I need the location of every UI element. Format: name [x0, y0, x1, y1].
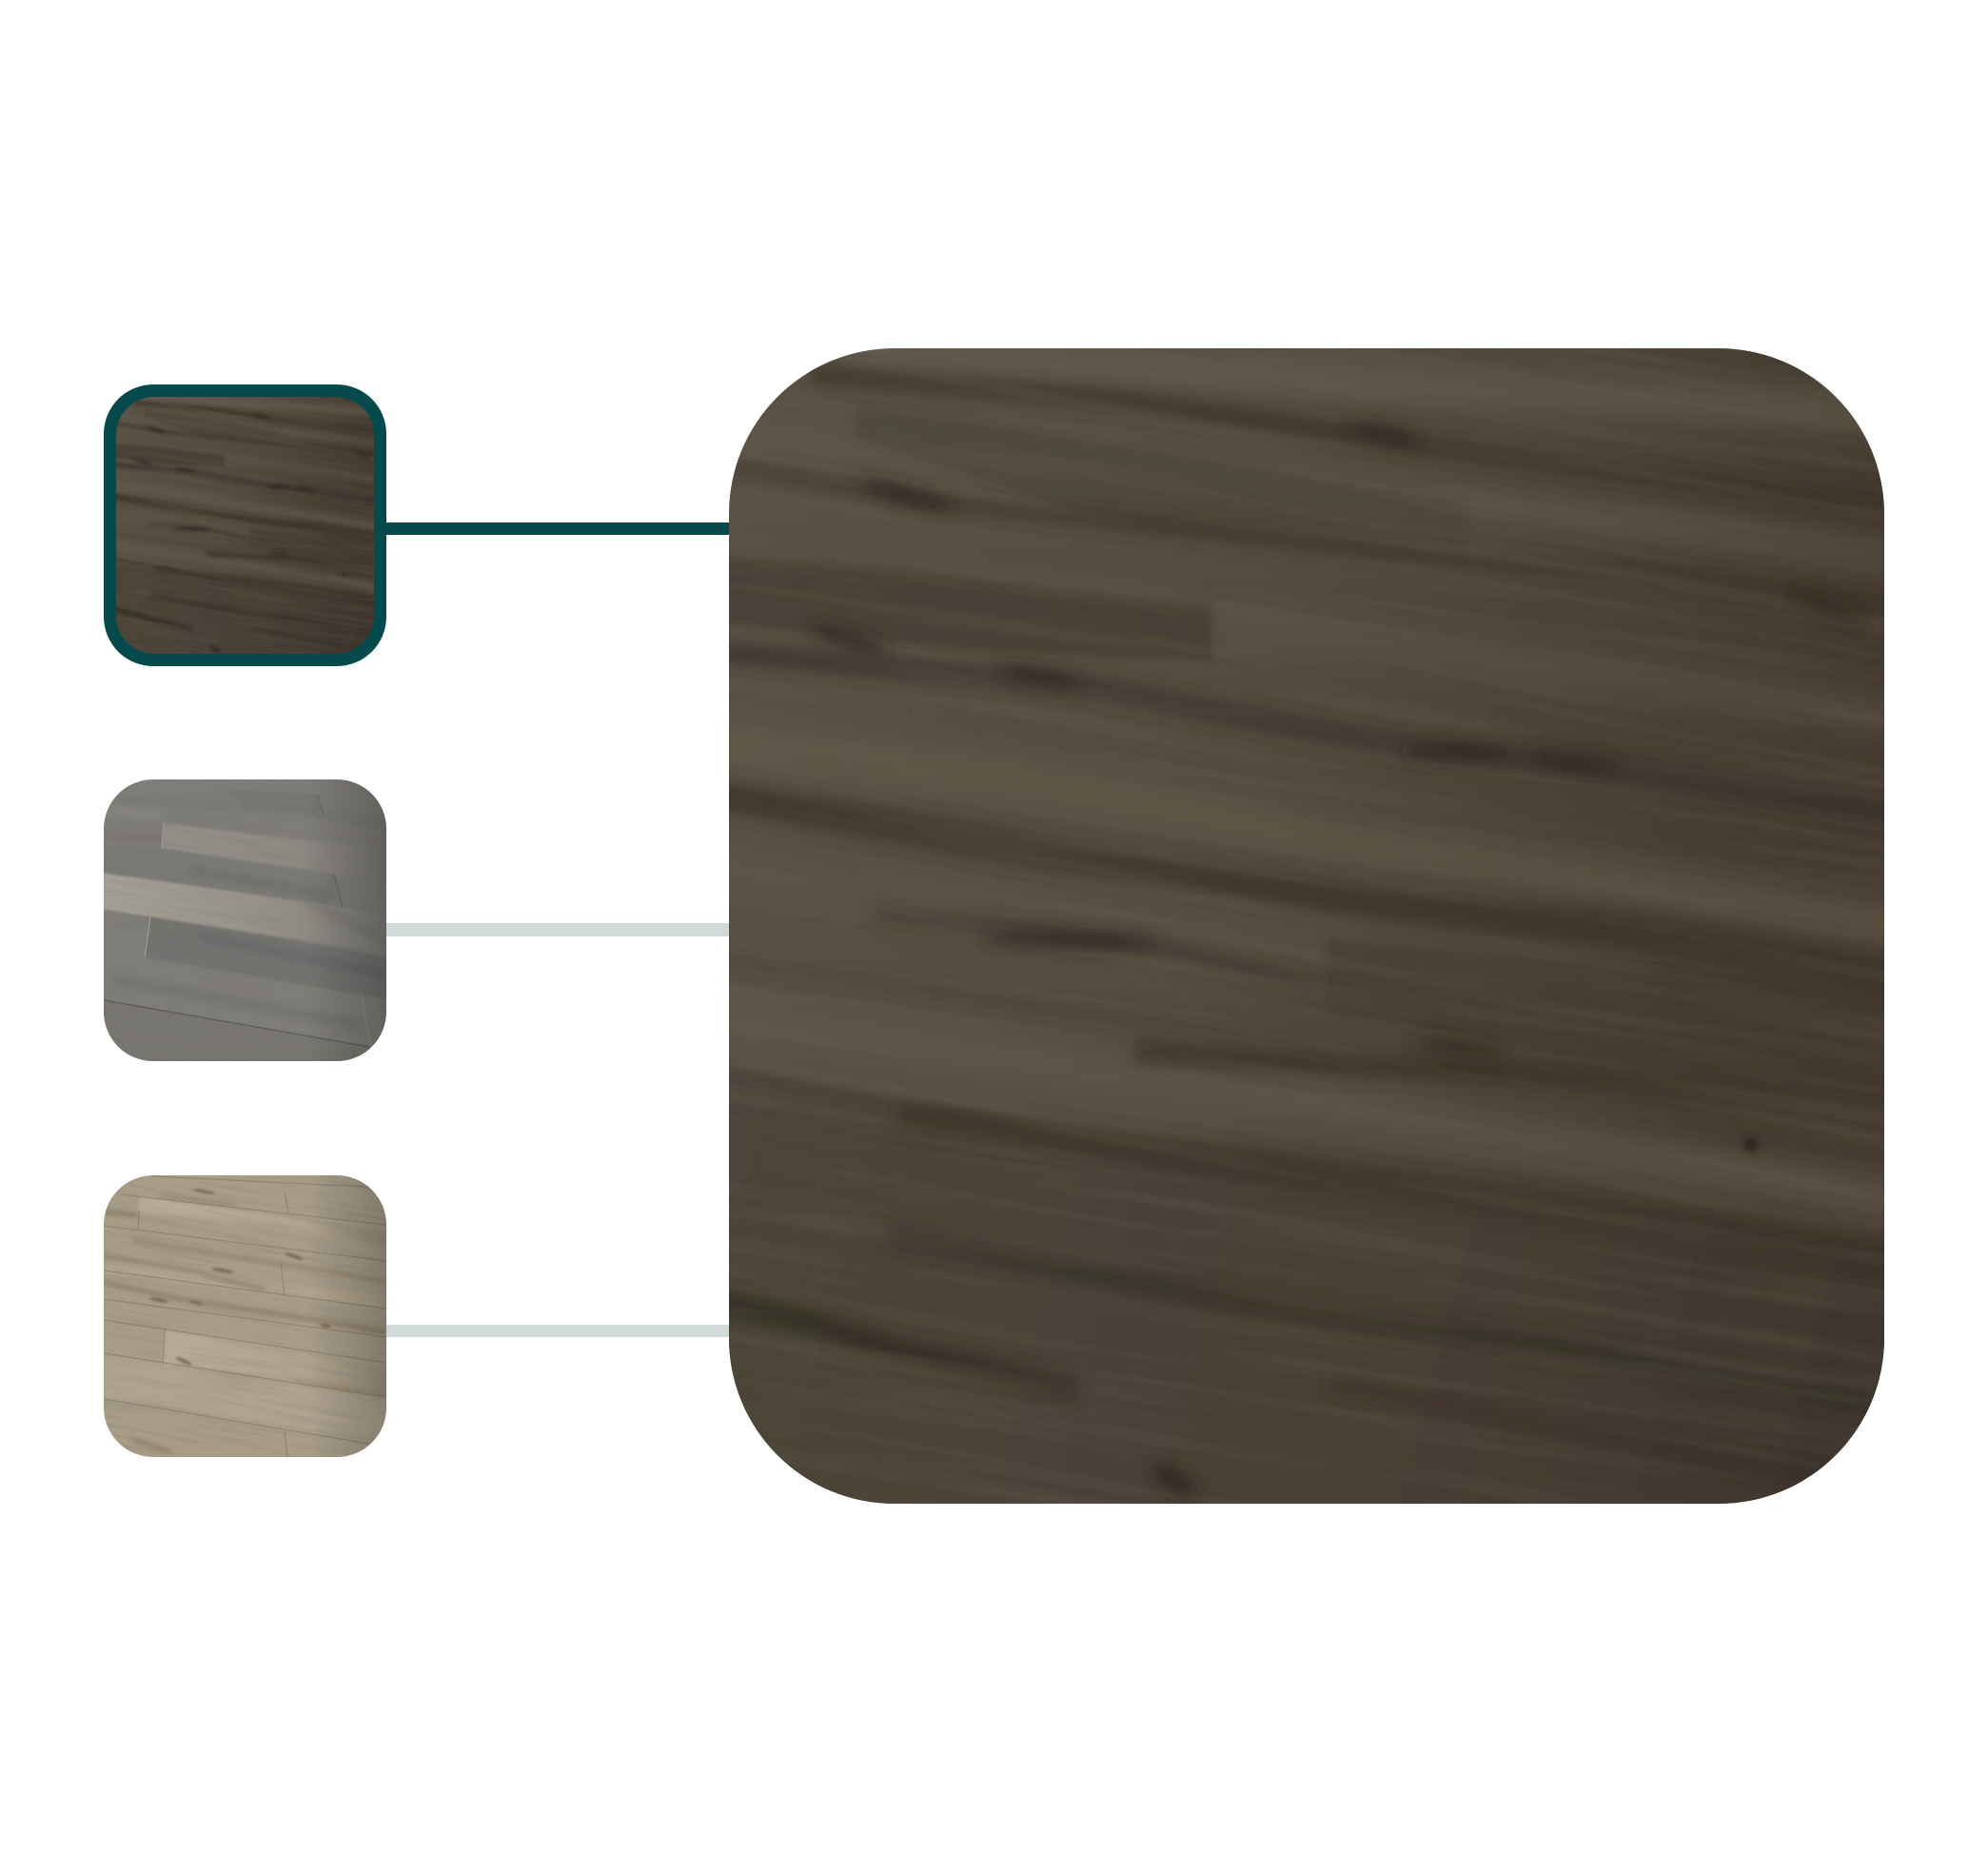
connector: tan swatch to main preview [381, 1325, 733, 1337]
connector: grey swatch to main preview [381, 923, 733, 936]
swatch: grey wood [104, 779, 386, 1456]
main preview: dark wood floor [729, 348, 1884, 1504]
swatch: tan wood [104, 1175, 386, 1457]
swatch: dark wood, selected [12, 317, 488, 737]
connector: selected swatch to main preview [381, 522, 733, 535]
